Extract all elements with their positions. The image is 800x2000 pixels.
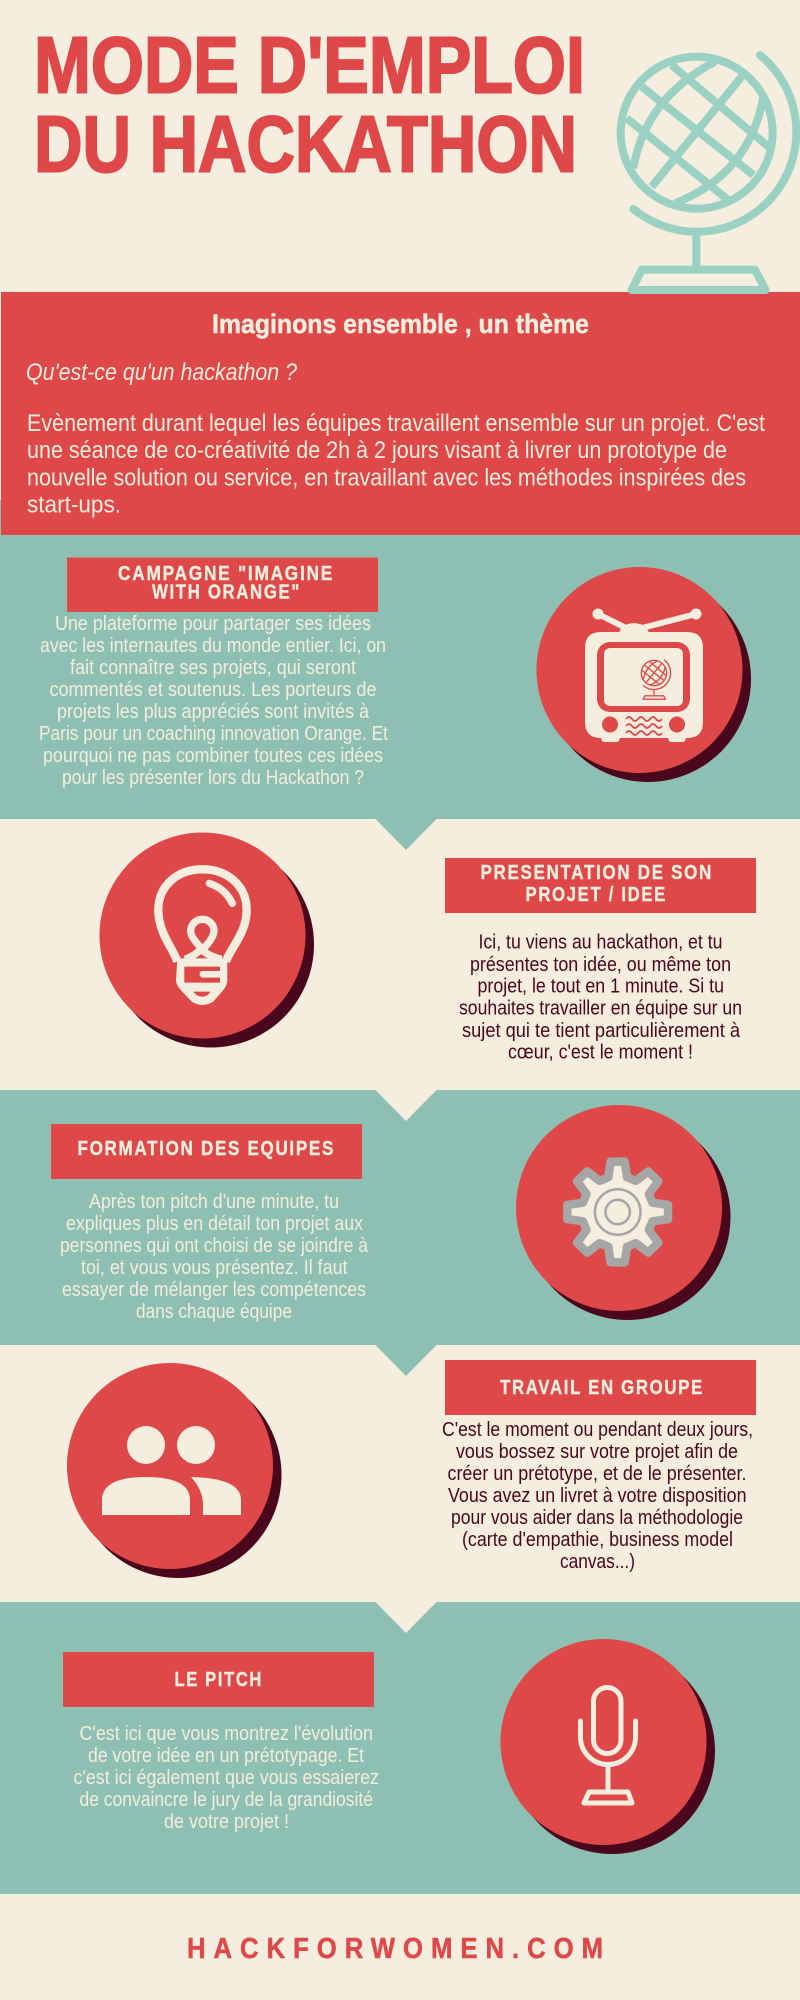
footer: website xyxy=(0,1894,800,2000)
arrow: pointer to pitch xyxy=(375,1602,437,1633)
text: presentation: Ici, tu viens au hackathon, et tu xyxy=(478,932,722,954)
text: presentation: présentes ton idée, ou même ton xyxy=(470,954,731,976)
intro paragraph: une séance de co-créativité de 2h à 2 jours visant à livrer un prototype de xyxy=(27,437,727,464)
panel: travail en groupe xyxy=(0,1344,800,1602)
panel: intro xyxy=(1,292,800,535)
text: campagne: pourquoi ne pas combiner toutes ces idées xyxy=(43,745,383,767)
text: formation: toi, et vous vous présentez. Il faut xyxy=(81,1257,348,1279)
text: formation: personnes qui ont choisi de se joindre à xyxy=(60,1235,369,1257)
text: formation: essayer de mélanger les compétences xyxy=(62,1279,366,1301)
panel: formation des equipes xyxy=(0,1090,800,1345)
text: travail: C'est le moment ou pendant deux jours, xyxy=(442,1419,753,1441)
panel: presentation de son projet xyxy=(0,818,800,1090)
text: campagne: projets les plus appréciés sont invités à xyxy=(57,701,370,723)
heading: formation: FORMATION DES EQUIPES xyxy=(78,1138,335,1160)
heading: pitch: LE PITCH xyxy=(174,1669,263,1691)
title: DU HACKATHON xyxy=(34,100,577,188)
text: presentation: cœur, c'est le moment ! xyxy=(508,1042,693,1064)
text: campagne: Une plateforme pour partager ses idées xyxy=(55,613,371,635)
text: formation: dans chaque équipe xyxy=(136,1301,292,1323)
heading: campagne xyxy=(67,558,378,612)
icon: television xyxy=(536,567,751,782)
title xyxy=(34,20,585,188)
arrow: pointer to formation xyxy=(375,1090,437,1121)
text: formation xyxy=(60,1191,369,1323)
text: campagne: Paris pour un coaching innovation Orange. Et xyxy=(39,723,388,745)
footer: website: HACKFORWOMEN.COM xyxy=(187,1933,611,1965)
text: travail: créer un prétotype, et de le présenter. xyxy=(448,1463,746,1485)
text: presentation xyxy=(459,932,742,1064)
text: campagne: fait connaître ses projets, qui seront xyxy=(70,657,356,679)
intro heading: Imaginons ensemble , un thème xyxy=(212,309,589,339)
text: travail: canvas...) xyxy=(560,1551,635,1573)
panel: le pitch xyxy=(0,1602,800,1894)
intro paragraph xyxy=(27,410,765,518)
icon: gear xyxy=(516,1105,730,1320)
intro paragraph: start-ups. xyxy=(27,492,121,518)
text: pitch: c'est ici également que vous essaierez xyxy=(74,1767,379,1789)
text: travail: (carte d'empathie, business model xyxy=(462,1529,733,1551)
text: presentation: souhaites travailler en équipe sur un xyxy=(459,998,742,1020)
heading: travail xyxy=(445,1360,756,1415)
icon: two people xyxy=(67,1363,282,1578)
text: campagne: commentés et soutenus. Les porteurs de xyxy=(50,679,376,701)
arrow: pointer to travail xyxy=(375,1344,437,1376)
text: pitch: C'est ici que vous montrez l'évolution xyxy=(80,1723,373,1745)
icon: microphone xyxy=(500,1639,715,1854)
heading: presentation xyxy=(445,858,756,913)
text: formation: expliques plus en détail ton projet aux xyxy=(66,1213,363,1235)
arrow: pointer to presentation xyxy=(375,818,437,850)
title: MODE D'EMPLOI xyxy=(34,20,585,110)
heading: presentation: PRESENTATION DE SON xyxy=(480,862,713,884)
text: travail: vous bossez sur votre projet afin de xyxy=(456,1441,738,1463)
text: pitch: de votre idée en un prétotypage. Et xyxy=(88,1745,364,1767)
text: pitch: de votre projet ! xyxy=(164,1811,289,1833)
text: pitch: de convaincre le jury de la grandiosité xyxy=(80,1789,373,1811)
text: presentation: projet, le tout en 1 minute. Si tu xyxy=(478,976,724,998)
text: formation: Après ton pitch d'une minute, tu xyxy=(89,1191,339,1213)
text: campagne xyxy=(39,613,388,789)
text: campagne: avec les internautes du monde entier. Ici, on xyxy=(40,635,386,657)
text: presentation: sujet qui te tient particulièrement à xyxy=(462,1020,741,1042)
text: travail: Vous avez un livret à votre disposition xyxy=(448,1485,746,1507)
text: travail: pour vous aider dans la méthodologie xyxy=(451,1507,743,1529)
text: travail xyxy=(442,1419,753,1573)
heading: pitch xyxy=(63,1652,374,1707)
icon: light bulb xyxy=(100,832,314,1048)
heading: campagne: CAMPAGNE "IMAGINE xyxy=(118,563,334,585)
heading: presentation: PROJET / IDEE xyxy=(526,884,667,906)
heading: formation xyxy=(51,1124,362,1179)
icon: globe xyxy=(621,55,796,290)
text: pitch xyxy=(74,1723,379,1833)
intro question: Qu'est-ce qu'un hackathon ? xyxy=(26,359,298,386)
panel: campagne imagine with orange xyxy=(0,535,800,819)
text: campagne: pour les présenter lors du Hackathon ? xyxy=(62,767,364,789)
heading: travail: TRAVAIL EN GROUPE xyxy=(500,1377,704,1399)
heading: campagne: WITH ORANGE" xyxy=(152,582,301,604)
